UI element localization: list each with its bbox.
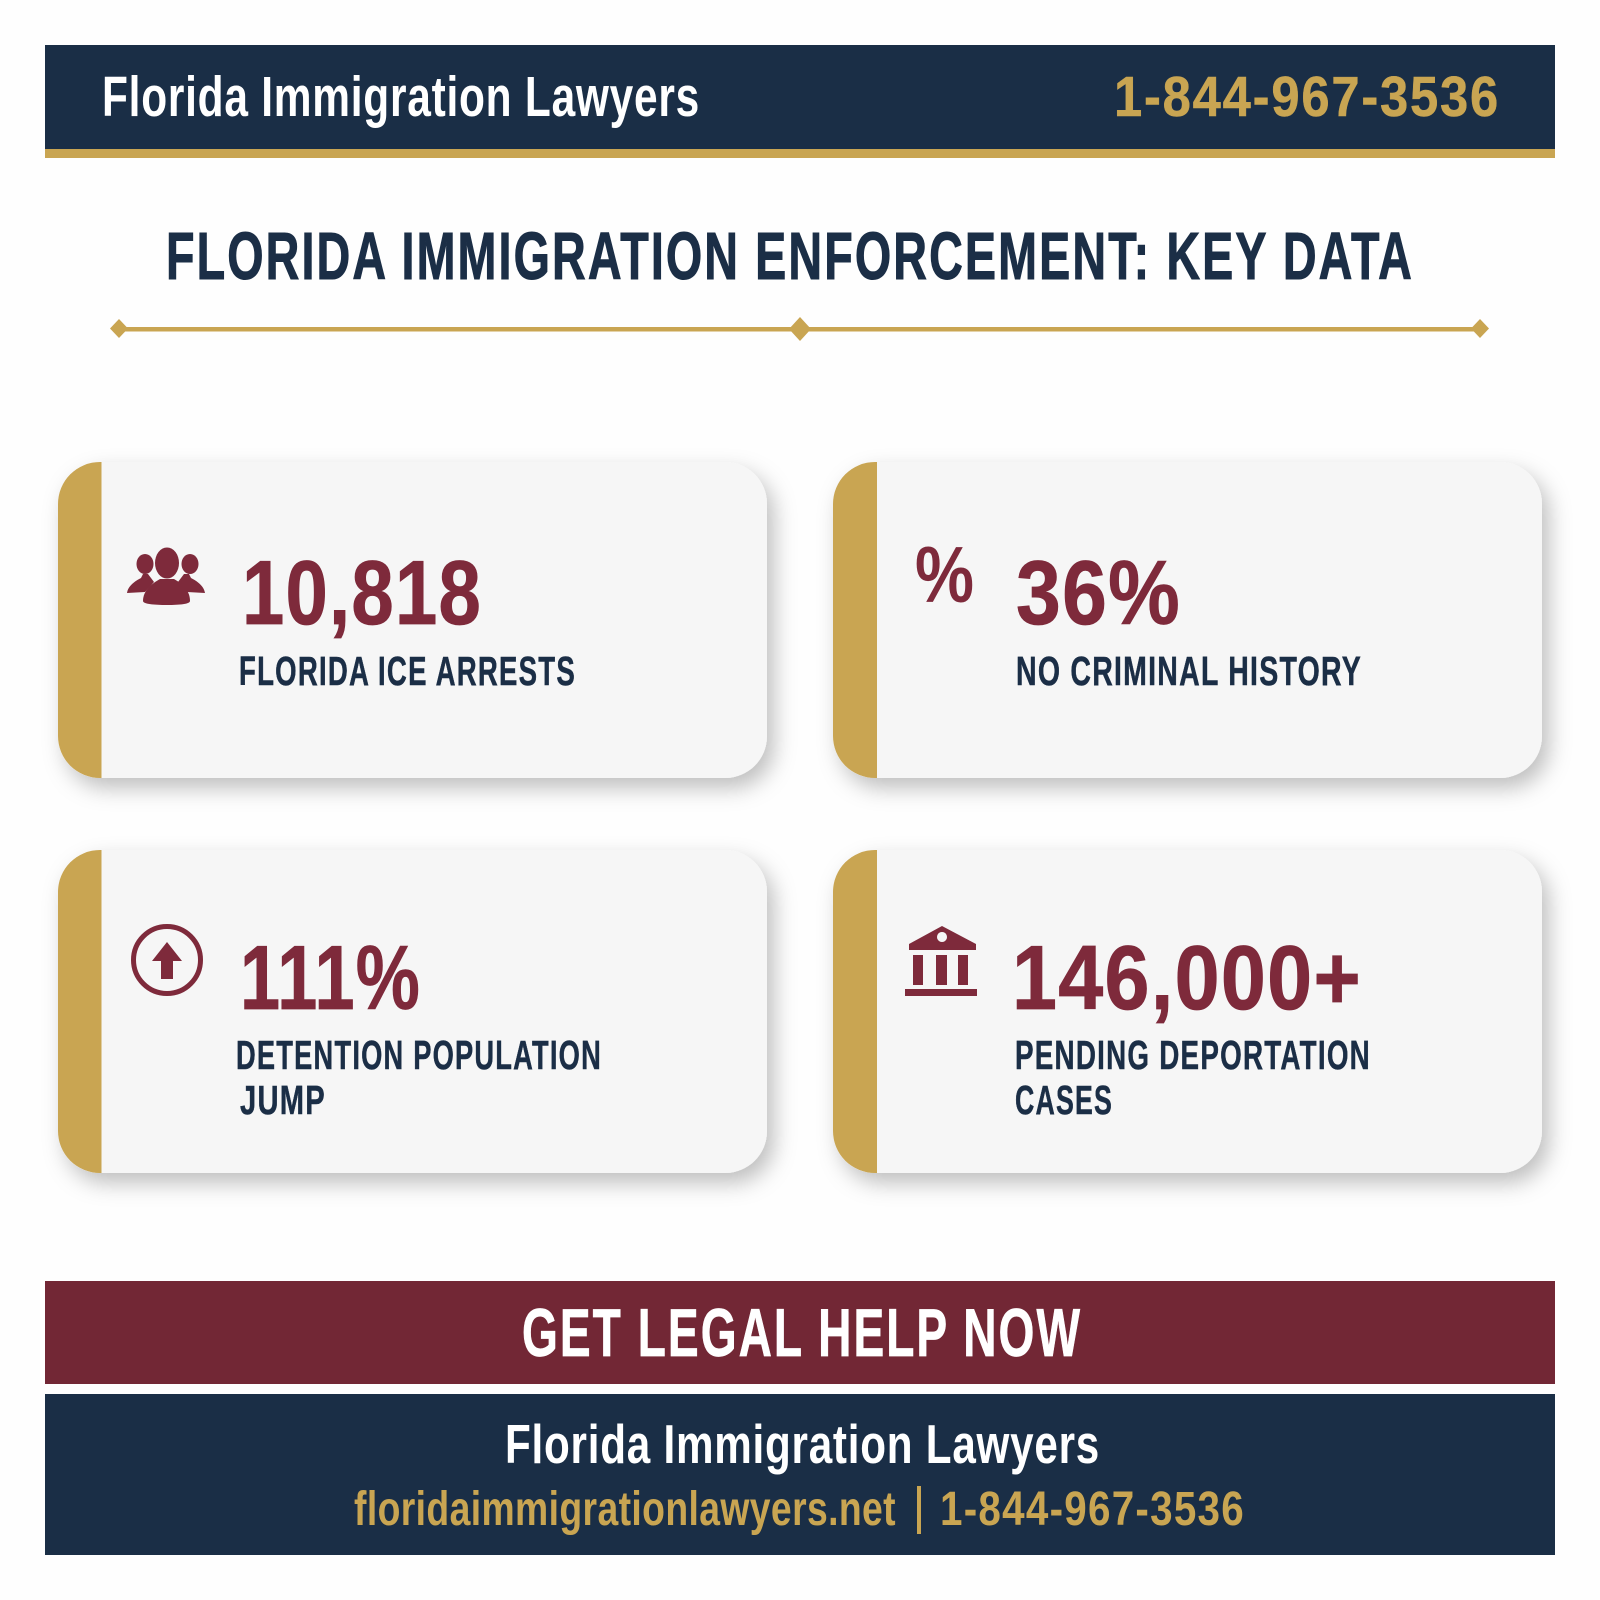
- icon: group of people: [127, 548, 205, 605]
- stat label: NO CRIMINAL HISTORY: [1016, 648, 1362, 694]
- footer firm name: Florida Immigration Lawyers: [505, 1413, 1100, 1475]
- stat value: 111%: [240, 928, 421, 1029]
- footer phone number: 1-844-967-3536: [940, 1483, 1245, 1536]
- footer banner: [45, 1394, 1555, 1555]
- stat label: [1015, 1032, 1371, 1123]
- call to action banner: [45, 1281, 1555, 1384]
- header banner: [45, 45, 1555, 158]
- icon: percent sign: %: [915, 530, 974, 619]
- stat label: PENDING DEPORTATION: [1015, 1032, 1371, 1078]
- header firm name: Florida Immigration Lawyers: [102, 65, 700, 129]
- stat value: 10,818: [242, 543, 482, 644]
- panel: pending deportation cases: [833, 850, 1542, 1173]
- stat label: DETENTION POPULATION: [236, 1032, 602, 1078]
- title divider: [110, 317, 1489, 341]
- header phone number: 1-844-967-3536: [1114, 65, 1500, 129]
- stat label: FLORIDA ICE ARRESTS: [239, 648, 576, 694]
- panel: detention population jump: [58, 850, 767, 1173]
- icon: courthouse: [905, 926, 977, 996]
- stat label: CASES: [1015, 1077, 1113, 1123]
- panel: no criminal history: [833, 462, 1542, 778]
- stat label: [236, 1032, 602, 1123]
- stat value: 36%: [1016, 543, 1181, 644]
- call to action text: GET LEGAL HELP NOW: [522, 1295, 1082, 1371]
- icon: up arrow in circle: [134, 926, 200, 994]
- panel: Florida ICE arrests: [58, 462, 767, 778]
- stat label: JUMP: [240, 1077, 326, 1123]
- footer website: floridaimmigrationlawyers.net: [354, 1483, 896, 1536]
- stat value: 146,000+: [1012, 928, 1362, 1029]
